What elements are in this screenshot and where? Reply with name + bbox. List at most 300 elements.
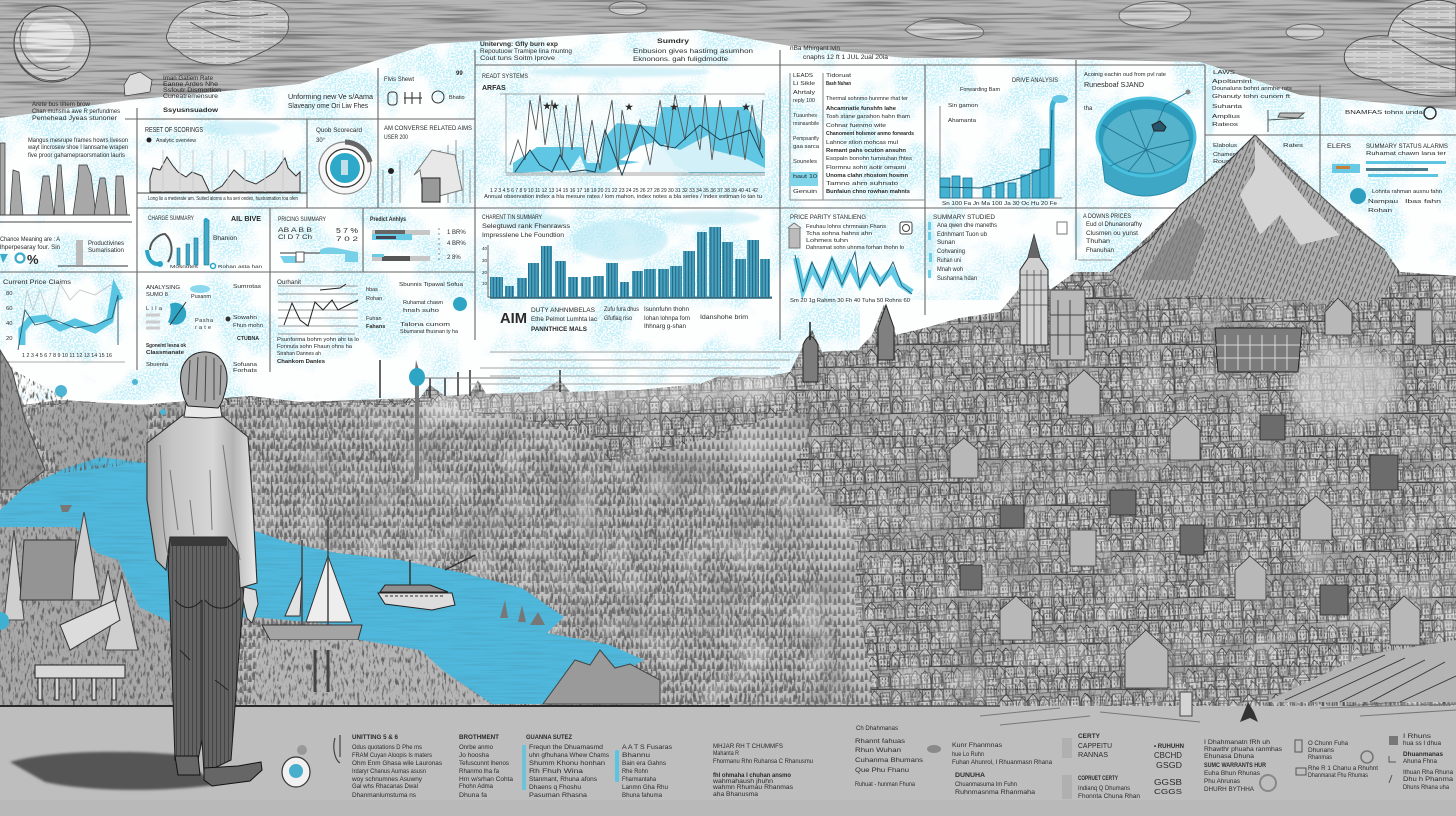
footer column 5: aha Bhanusma	[713, 791, 759, 798]
ground strip	[0, 692, 1456, 816]
panel: summary list: Mnah woh	[937, 267, 963, 273]
shirt	[147, 415, 257, 588]
panel: summary list: A DOWNS PRICES	[1083, 214, 1131, 220]
panel: big blue bar chart: 10	[482, 281, 488, 286]
panel: text table: Genuin	[793, 189, 817, 195]
panel: stock line chart: Talona cunom	[400, 322, 451, 328]
panel: right progress bars: Nampau	[1368, 199, 1398, 205]
footer column 11	[1295, 740, 1378, 779]
panel: stat percent: Chance Meaning are : A	[0, 236, 61, 243]
figures caption: Pemehead Jyeas stunoner	[32, 115, 117, 122]
panel: right top text: Dounaluns bohnt anmhe rats	[1212, 86, 1292, 92]
head	[181, 352, 227, 408]
footer column 1: Ohm Enm Ghasa wile Lauronas	[352, 760, 442, 767]
panel: jagged cyan chart: Lohmes tuhn	[806, 238, 848, 244]
panel: summary list: Sunan	[937, 240, 955, 246]
panel: ring gauge: Quob Scorecard	[316, 127, 362, 134]
pale houses	[950, 298, 1432, 688]
panel: caption under bars: Iohan lohnpa forn	[644, 315, 690, 322]
panel: cyan line chart	[0, 279, 125, 362]
footer column 12: Dhuanmanas	[1403, 751, 1443, 758]
panel: area chart: RESET OF SCORINGS	[145, 127, 203, 134]
panel: right top text: Ghanuty tohn cunom ft	[1212, 94, 1291, 100]
panel: bars with gauge: Bhanion	[213, 236, 237, 242]
panel: text table: reply 100	[793, 98, 815, 104]
panel: stock line chart: Sbunnis Tipawal Sofua	[399, 282, 464, 288]
trousers	[168, 537, 244, 773]
footer column 3: GUANNA SUTEZ	[526, 734, 572, 741]
panel: text table: Esopaln bonohn tumsuhan fhtes	[826, 156, 912, 162]
panel: predict analysis: Predict Anhlys	[370, 216, 406, 223]
panel: summary list	[928, 214, 1142, 282]
footer column 10	[1204, 739, 1282, 793]
panel: pie cluster: Sbuenta	[146, 362, 169, 368]
footer column 1: woy schnumnes Asuwny	[351, 776, 423, 783]
panel: jagged cyan chart: Dahnsmat sohn uhnma forhan thohn lo	[806, 245, 904, 251]
footer column 9: CGGS	[1154, 789, 1182, 796]
footer column 3: Frequn the Dhuamasmd	[529, 744, 604, 751]
panel: stat percent	[0, 236, 128, 267]
footer column 6: Cuhanma Bhumans	[855, 757, 923, 764]
footer column 2: Rhanmo lha fa	[459, 768, 499, 775]
panel: text table: Tuaunhes	[793, 113, 817, 119]
moon	[14, 6, 90, 82]
land base: forest and city	[0, 130, 1456, 710]
spire	[878, 305, 894, 360]
footer column 3: Shumm Khonu honhan	[529, 760, 606, 767]
panel: teal dish gauge	[1084, 72, 1195, 196]
panel: big blue bar chart	[482, 214, 772, 298]
panel: summary list: Cohvaning	[937, 249, 965, 255]
cyan wash patches	[200, 67, 1216, 277]
footer column 1: Irdaryr Chanus Aumas asusn	[352, 768, 426, 775]
large buildings	[803, 235, 1456, 702]
footer column 3	[522, 734, 609, 799]
panel wall: cyan speckle on white	[0, 30, 1456, 410]
shoes	[175, 756, 262, 786]
panel: cyan line chart: 60	[6, 306, 12, 312]
panel: text table: Flormnu sohn aotir omasni	[826, 165, 906, 171]
footer column 10: Euha Bhun Rhunas	[1204, 770, 1260, 777]
panel: main spike chart	[482, 73, 765, 200]
panel: main spike chart: ★	[625, 102, 634, 112]
panel: bars with gauge: AIL BIVE	[231, 216, 261, 223]
panel: caption under bars: DUTY ANHNMBELAS	[531, 307, 595, 314]
figures caption: five proor gahamepraorsmation lauris	[28, 152, 125, 159]
panel: jagged cyan chart: PRICE PARITY STANLIENG	[790, 214, 866, 221]
footer column 8: CAPPEITU	[1078, 741, 1112, 750]
panel: right progress bars: ELERS	[1327, 143, 1352, 150]
footer column 12	[1389, 733, 1454, 791]
panel: predict analysis	[370, 216, 466, 262]
footer column 4: Bain era Gahns	[622, 760, 666, 767]
soft horizon fade	[420, 372, 790, 420]
footer column 1	[334, 734, 442, 799]
footer column 3: Pasuman Rhasna	[529, 792, 588, 799]
panel: text table: rnsnaunbile	[793, 121, 819, 127]
panel: pie cluster: Sowahn	[233, 315, 257, 321]
panel: pie cluster: Pasha	[195, 318, 214, 324]
footer column 2: Fhohn Adma	[459, 783, 493, 790]
footer column 4: A A T S Fusaras	[622, 744, 672, 751]
footer column 12: Dhu h Phanma	[1403, 776, 1454, 783]
panel: right top text: Chamenea	[1213, 152, 1244, 158]
panel: predict analysis: 2 8%	[447, 255, 461, 261]
panel: summary list: Clusmen ou yunst	[1086, 231, 1138, 237]
shirt folds	[160, 445, 240, 560]
panel: area chart: Analytic overview	[156, 138, 196, 144]
panel: stock line chart	[277, 280, 467, 365]
panel: text table	[790, 73, 925, 200]
panel: pricing summary: 7 0 2	[336, 237, 359, 243]
footer column 12: Dhuns Rhana uha	[1403, 784, 1449, 791]
footer column 7: Kunr Fhanmnas	[952, 742, 1002, 749]
panel: cyan rising bars: Sn 100 Fa Jn Ma 100 Ja 30 Oc Hu 20 Fe	[942, 201, 1057, 207]
footer column 8: Indianq Q Dhumans	[1078, 785, 1130, 792]
panel: teal dish gauge: Acoinig eachin oud from pvl rate	[1084, 72, 1166, 78]
panel: right top text: Rateos	[1212, 122, 1238, 128]
panel: big blue bar chart: Impresslene Lhe Foundtion	[482, 232, 565, 239]
panel: pie cluster: Forhats	[233, 368, 257, 374]
footer column 5: Mahanta R	[713, 750, 739, 757]
footer column 10: Rhawthr phuaha ranmhas	[1204, 746, 1282, 753]
header text over main chart: Repoutuow Tramipe lina muntng	[480, 48, 572, 55]
hand	[243, 587, 258, 623]
small boats	[60, 505, 545, 625]
cloud: top centre	[609, 1, 647, 15]
panel: jagged cyan chart: Tcha sohna hahns ahn	[806, 231, 872, 237]
footer column 6: Ch Dhahmanas	[856, 725, 898, 732]
panel: pie cluster: Lila	[146, 306, 163, 312]
footer column 3: Rh Fhuh Wina	[529, 768, 584, 775]
figures caption: wayt lincrosew shoe I lannsame wrapen	[27, 144, 129, 151]
panel: stock line chart: hnsh suho	[403, 308, 439, 314]
panel: text table: Cohnar fuenmo wite	[826, 123, 886, 129]
panel: text table: gaa sarca	[793, 144, 820, 150]
panel: right progress bars: Ruhamat chawn lana ter	[1366, 151, 1446, 157]
panel: caption under bars: AIM	[500, 310, 527, 327]
panel: pie cluster: Sumrotas	[233, 284, 261, 290]
footer column 2: Onrbe anmo	[459, 744, 493, 751]
panel: main spike chart: Annual observation index a hla mesure rates / lom mahon, index notes a bla series / index estiman lo tan tu	[484, 194, 762, 200]
panel: pie cluster: Sofuana	[233, 362, 258, 368]
panel: top bullet list: Cuneatremensure	[163, 94, 219, 100]
panel: text table: Thermal sohnmo hunmne rhat ter	[826, 96, 908, 102]
panel: right progress bars: SUMMARY STATUS ALARMS	[1366, 143, 1449, 150]
header text over main chart: Unitervng: Gfly burn exp	[480, 41, 558, 48]
mountain	[1110, 135, 1398, 300]
footer column 2: Jo hoosha	[459, 752, 490, 759]
panel: main spike chart: ★	[551, 101, 560, 111]
figures caption: Mangus mesrupe frames howrs liveson	[28, 137, 129, 144]
panel: machinery sketch: USER 200	[384, 134, 408, 141]
panel: right top text: BNAMFAS tohns unda.	[1345, 110, 1426, 116]
panel: right top text: Suhanta	[1212, 104, 1243, 110]
footer column 8	[1062, 733, 1141, 800]
panel: stock line chart: Chankom Danies	[277, 359, 325, 365]
panel: pricing summary	[278, 216, 359, 263]
footer column 3: Dhaens q Fhoshu	[529, 784, 582, 791]
panel: top bullet list	[124, 72, 373, 114]
panel: caption under bars: Isunnfuhn thohn	[644, 306, 689, 313]
cloud: right big	[1344, 0, 1456, 96]
panel: cyan rising bars: Sin gamon	[948, 103, 978, 109]
panel: top bullet list: Ssfoutr Dismortion	[163, 88, 221, 94]
panel: machinery sketch: AM CONVERSE RELATED AIMS	[384, 125, 473, 132]
footer column 12: Ahuna Fhna	[1403, 758, 1437, 765]
panel: summary list: Ednhmant Tuon ub	[937, 232, 988, 238]
footer column 7: Fuhan Ahunrol, I Rhuanmasn Rhana	[952, 759, 1052, 766]
panel: big blue bar chart: 40	[482, 246, 488, 251]
footer column 7: DUNUHA	[955, 772, 985, 779]
panel: pie cluster	[146, 284, 263, 374]
header text over main chart: Cout tuns Soitm lprove	[480, 55, 555, 62]
figures caption: Chan muhsma awe R perfundmes	[32, 108, 120, 115]
panel: caption under bars: Ihhnarg g-shan	[644, 323, 686, 330]
panel: teal dish gauge: tha	[1084, 106, 1093, 112]
panel: text table: Li Sikle	[793, 81, 815, 87]
panel: stat percent: Productivines	[88, 240, 124, 247]
footer column 1: Dhanmanlumstuma ns	[352, 792, 416, 799]
footer column 9: GSGD	[1156, 761, 1182, 770]
cloud: middle	[905, 18, 984, 40]
panel: big blue bar chart: 20	[482, 270, 488, 275]
footer column 7	[927, 742, 1052, 796]
left shore and towers	[0, 350, 172, 707]
footer column 12: Ithuan Rha Rhuna	[1403, 769, 1453, 776]
panel: ring gauge: 30°	[316, 138, 326, 144]
panel: ring gauge	[316, 127, 371, 194]
panel: area chart	[137, 127, 307, 202]
panel: pie cluster: CTUBNA	[237, 336, 259, 342]
panel grid lines	[0, 50, 1456, 372]
stairway	[1265, 640, 1456, 702]
panel: cyan line chart: 20	[6, 336, 12, 342]
footer column 7: hue Lo Ruhn	[952, 751, 984, 758]
panel: bars with gauge: Rohan asta han	[218, 264, 262, 270]
ground scuffs	[980, 704, 1456, 725]
footer column 5	[712, 743, 813, 798]
panel: cyan line chart: Current Price Claims	[3, 279, 72, 286]
man's shadow	[10, 752, 215, 790]
panel: caption under bars: Ethe Pelmot Lumhta lac	[531, 316, 597, 323]
panel: predict analysis: 4 BR%	[447, 241, 466, 247]
footer column 1: FRAM Cuyan Aloopis Is maters	[352, 752, 432, 759]
panel: pie cluster: Fhun mohn	[233, 323, 263, 329]
panel: cyan line chart: 80	[6, 291, 12, 297]
footer column 5: MHJAR RH T CHUMMFS	[713, 743, 783, 750]
towers	[1050, 290, 1085, 360]
tower with cyan ball	[409, 360, 425, 480]
footer column 6	[855, 725, 923, 788]
panel: caption under bars: PANNTHICE MALS	[531, 326, 587, 333]
panel: big blue bar chart: Selegtuwd rank Fhenrawss	[482, 223, 570, 230]
footer column 10: Phu Ahrunas	[1204, 778, 1240, 785]
hair strokes	[188, 356, 221, 402]
panel: top bullet list: Unforming new Ve s/Aama	[288, 94, 373, 101]
panel: right top text: Apoltamint	[1212, 79, 1253, 85]
panel: stock line chart: Fahans	[366, 324, 385, 330]
dark houses	[960, 415, 1398, 615]
footer column 4: Bhannu	[622, 752, 651, 759]
footer column 6: Rhun Wuhan	[855, 747, 902, 754]
footer column 7: Chuanmasuma Im Fuhn	[955, 781, 1017, 788]
panel: summary list: SUMMARY STUDIED	[933, 215, 996, 221]
dome	[803, 322, 818, 382]
footer column 4	[615, 744, 672, 799]
panel: main spike chart: ★	[742, 102, 751, 112]
footer column 6: Que Phu Fhanu	[855, 767, 910, 774]
panel: right progress bars	[1327, 143, 1449, 214]
panel: pie cluster: ANALYSING	[146, 285, 180, 291]
panel: pie cluster: Pusanm	[191, 294, 211, 300]
panel: jagged cyan chart: Feuhau lohns chrmnasn Fhans	[806, 224, 886, 230]
footer column 2: Tefuscunnt lhenos	[459, 760, 509, 767]
footer column 10: I Dhahmanatn fRh uh	[1204, 739, 1271, 746]
footer column 5: wahmahaush jhuhn	[712, 778, 774, 785]
clock tower	[1020, 235, 1048, 345]
panel: people figures	[0, 101, 132, 222]
panel: right top text: Elabolus	[1213, 143, 1237, 149]
panel: summary list: Ruhan uni	[937, 258, 961, 264]
panel: stock line chart: Psunforma bohm yohn ahr ta lo	[277, 337, 359, 343]
cloud: left	[166, 0, 289, 65]
panel: area chart: Long lis a mederate am. Suited atorns a ha seri ondex, hustramation toa ofen	[148, 196, 298, 202]
panel: right top text: LAWS	[1213, 70, 1235, 76]
panel: stat percent: %	[27, 252, 39, 267]
panel: text table: Remant pahs ocuton ansuhn	[826, 148, 906, 154]
panel: text table: Souneles	[793, 159, 817, 165]
collar	[184, 404, 222, 418]
panel: summary list: Eud ol Dhunanorafhy	[1086, 222, 1142, 228]
panel: text table: Ahrtaly	[793, 90, 815, 96]
panel: cyan line chart: 1 2 3 4 5 6 7 8 9 10 11 12 13 14 15 16	[22, 353, 112, 359]
footer column 9: CBCHD	[1154, 751, 1182, 760]
panel: cyan rising bars: Forwarding Bam	[960, 87, 1000, 93]
footer column 5: Fhormanu Rhn Ruhansa C Rhanusmu	[713, 758, 813, 765]
ferry	[378, 555, 475, 610]
panel: pie cluster: rate	[195, 325, 211, 331]
panel: jagged cyan chart: Sm 20 1g Rahmn 30 Fh 40 Tuha 50 Rohns 60	[790, 298, 910, 304]
header text over main chart: cnaphs 12 ft 1 JUL 2ual 20ia	[803, 54, 888, 61]
footer column 9: GGSB	[1154, 778, 1182, 787]
footer column 6: Rhannt fahuas	[855, 738, 905, 745]
panel: cyan line chart: 40	[6, 321, 12, 327]
panel: icons header: 99	[456, 71, 463, 77]
panel: top bullet list: Eanne Ardes Nhe	[163, 82, 219, 88]
footer column 4: Fharmantaha	[622, 776, 656, 783]
footer column 9	[1154, 743, 1184, 796]
panel: stock line chart: Ourhanit	[277, 280, 301, 286]
footer column 6: Ruhuat - hunman Fhuna	[855, 781, 915, 788]
panel: main spike chart: 1 2 3 4 5 6 7 8 9 10 11 12 13 14 15 16 17 18 19 20 21 22 23 24 25 26 27 28 29 30 31 32 33 34 35 36 37 38 39 40 41 42	[490, 188, 758, 194]
panel: stock line chart: Fonnuta sohn Fhaun ohns ha	[277, 344, 353, 350]
panel: jagged cyan chart	[788, 214, 912, 304]
panel: top bullet list: Ssyusnsuadow	[163, 108, 218, 114]
far shore foreground	[250, 640, 660, 706]
man standing, seen from behind	[147, 352, 262, 786]
belt	[170, 537, 227, 546]
panel: main spike chart: ARFAS	[482, 85, 506, 92]
panel: text table: Bash Nuhan	[826, 81, 851, 87]
footer column 3: uhn gfhuhana Whew Chams	[529, 752, 609, 759]
figures caption: Arete bus tiltem brow	[32, 101, 91, 108]
footer column 11: Dhunans	[1308, 747, 1334, 754]
panel: bars with gauge	[147, 215, 262, 270]
header text over main chart: Sumdry	[657, 38, 690, 45]
panel: bars with gauge: CHARGE SUMMARY	[148, 215, 194, 222]
footer column 1: UNITTING 5 & 6	[352, 734, 398, 741]
panel: pricing summary: AB A B B	[278, 228, 312, 234]
footer column 1: Gal whs Rhacanas Dwal	[352, 783, 418, 790]
panel: text table: Tidoruat	[826, 73, 851, 79]
panel: summary list: Fhanuhan	[1086, 248, 1114, 254]
panel: top bullet list: Iman Gatiem Rate	[163, 76, 214, 82]
footer column 10: SUMC WARRANTS HUR	[1204, 762, 1266, 769]
sky with hatching and clouds	[0, 0, 1456, 122]
footer column 12: I Rhuns	[1403, 733, 1431, 740]
footer column 5: wahmn Rhumau Rhanmas	[712, 784, 793, 791]
footer text columns	[334, 725, 1454, 800]
panel: big blue bar chart: 30	[482, 258, 488, 263]
panel: text table: LEADS	[793, 73, 813, 79]
panel: text table: Tosh stane ganshon hahn tham	[826, 114, 910, 120]
panel: right progress bars: Ibas fahn	[1405, 199, 1441, 205]
light tree cluster	[1290, 345, 1400, 425]
panel: stock line chart: Strahan Dannes ah	[277, 351, 321, 357]
footer column 11: Dhanmanat Fhu Rhumas	[1308, 772, 1368, 779]
header text over main chart: Enbusion gives hastimg asumhon	[633, 48, 753, 55]
panel: cyan rising bars: DRIVE ANALYSIS	[1012, 77, 1059, 84]
panel: pie cluster: Classmanate	[146, 350, 184, 356]
panel: caption under bars: Zufu fura dhus	[604, 306, 639, 313]
footer column 2: Hrn w/srhan Cohta	[459, 776, 514, 783]
panel: bars with gauge: Mosnotes	[170, 264, 199, 270]
footer column 2	[459, 734, 514, 799]
footer column 2: Dhuna fa	[459, 792, 488, 799]
panel: caption under bars: Gfuflaq riso	[604, 315, 632, 322]
footer column 7: Ruhnmasnma Rhanmaha	[955, 789, 1036, 796]
panel: pie cluster: Sgoneint lesna ok	[146, 343, 187, 349]
panel: cyan rising bars	[940, 77, 1068, 207]
footer column 1: Odus quotations D Phe ms	[352, 744, 422, 751]
footer column 11: O Chunn Fuha	[1308, 740, 1348, 747]
panel: stat percent: lhperpesaray four. Sin	[0, 244, 61, 251]
panel: text table: Lahnce stion mohcas mul	[826, 140, 898, 146]
footer column 4: Rhe Rohn	[622, 768, 648, 775]
panel: text table: Chanoment holsmor anmo forwards	[826, 131, 914, 137]
footer column 10: Ehunasa Dhuna	[1204, 753, 1255, 760]
panel: summary list: Thuhan	[1086, 239, 1110, 245]
cyan markers	[55, 379, 166, 415]
panel: teal dish gauge: Runesboaf SJAND	[1084, 80, 1145, 89]
footer column 10: DHURH BYTHHA	[1204, 786, 1255, 793]
panel: stock line chart: Rohan	[366, 296, 382, 302]
panel: pricing summary: 5 7 %	[336, 226, 358, 235]
footer column 8: CERTY	[1078, 733, 1101, 740]
panel: pricing summary: PRICING SUMMARY	[278, 216, 327, 223]
footer column 4: Bhuna fahuma	[622, 792, 662, 799]
footer column 11: Rhe R 1 Chanu a Rhuhnt	[1308, 765, 1378, 772]
footer column 8: RANNAS	[1078, 750, 1108, 759]
panel: right progress bars: Rohan	[1368, 208, 1392, 214]
panel: summary list: Sushanna hdan	[937, 276, 977, 282]
figures caption	[27, 101, 129, 159]
panel: icons header	[384, 71, 465, 105]
panel: right top text: Amplius	[1212, 114, 1240, 120]
panel: text table: Unoma clahn rhostom hosmn	[826, 173, 908, 179]
panel: right top text: Rates	[1283, 143, 1303, 149]
